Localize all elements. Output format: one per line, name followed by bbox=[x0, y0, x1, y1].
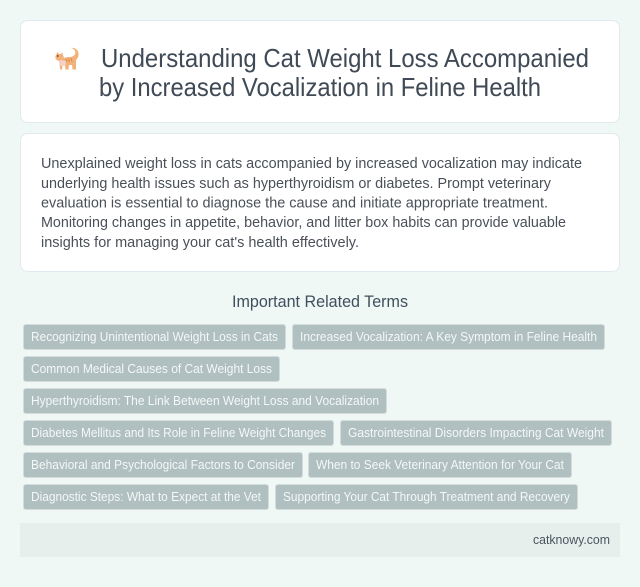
panel: summary card bbox=[20, 134, 620, 272]
tag: recognizing weight loss bbox=[24, 324, 286, 350]
tag list bbox=[24, 324, 612, 510]
tag: diagnostic steps bbox=[24, 484, 268, 510]
summary text: insights for managing your cat's health effectively. bbox=[41, 234, 359, 251]
summary text: underlying health issues such as hyperthyroidism or diabetes. Prompt veterinary bbox=[41, 175, 551, 192]
tag: hyperthyroidism: Hyperthyroidism: The Link Between Weight Loss and Vocalization bbox=[31, 393, 379, 408]
summary text: Unexplained weight loss in cats accompanied by increased vocalization may indicate bbox=[41, 155, 582, 172]
panel: title card bbox=[20, 20, 620, 122]
tag: gastrointestinal: Gastrointestinal Disorders Impacting Cat Weight bbox=[348, 425, 604, 440]
tag: gastrointestinal bbox=[340, 420, 612, 446]
tag: behavioral factors: Behavioral and Psychological Factors to Consider bbox=[31, 457, 296, 472]
summary text: evaluation is essential to diagnose the cause and initiate appropriate treatment. bbox=[41, 194, 548, 212]
icon: cat bbox=[55, 48, 79, 70]
title heading: Understanding Cat Weight Loss Accompanied bbox=[101, 43, 589, 73]
title heading: by Increased Vocalization in Feline Health bbox=[99, 72, 541, 102]
tag: diabetes bbox=[24, 420, 334, 446]
related terms heading: Important Related Terms bbox=[232, 292, 408, 311]
tag: supporting treatment bbox=[276, 484, 578, 510]
footer site name: catknowy.com bbox=[533, 532, 610, 547]
tag: diabetes: Diabetes Mellitus and Its Role in Feline Weight Changes bbox=[31, 425, 326, 440]
title heading bbox=[99, 43, 589, 102]
tag: medical causes: Common Medical Causes of Cat Weight Loss bbox=[31, 361, 272, 376]
tag: hyperthyroidism bbox=[24, 388, 386, 414]
tag: supporting treatment: Supporting Your Cat Through Treatment and Recovery bbox=[283, 489, 570, 504]
tag: veterinary attention bbox=[308, 452, 572, 478]
summary text: Monitoring changes in appetite, behavior, and litter box habits can provide valuable bbox=[41, 214, 566, 231]
tag: medical causes bbox=[24, 356, 280, 382]
tag: increased vocalization bbox=[292, 324, 604, 350]
tag: increased vocalization: Increased Vocalization: A Key Symptom in Feline Health bbox=[300, 329, 597, 344]
tag: recognizing weight loss: Recognizing Unintentional Weight Loss in Cats bbox=[31, 329, 278, 344]
tag: behavioral factors bbox=[24, 452, 302, 478]
footer bbox=[20, 523, 620, 557]
tag: veterinary attention: When to Seek Veterinary Attention for Your Cat bbox=[316, 457, 564, 472]
summary text bbox=[41, 155, 582, 251]
tag: diagnostic steps: Diagnostic Steps: What to Expect at the Vet bbox=[31, 489, 261, 504]
